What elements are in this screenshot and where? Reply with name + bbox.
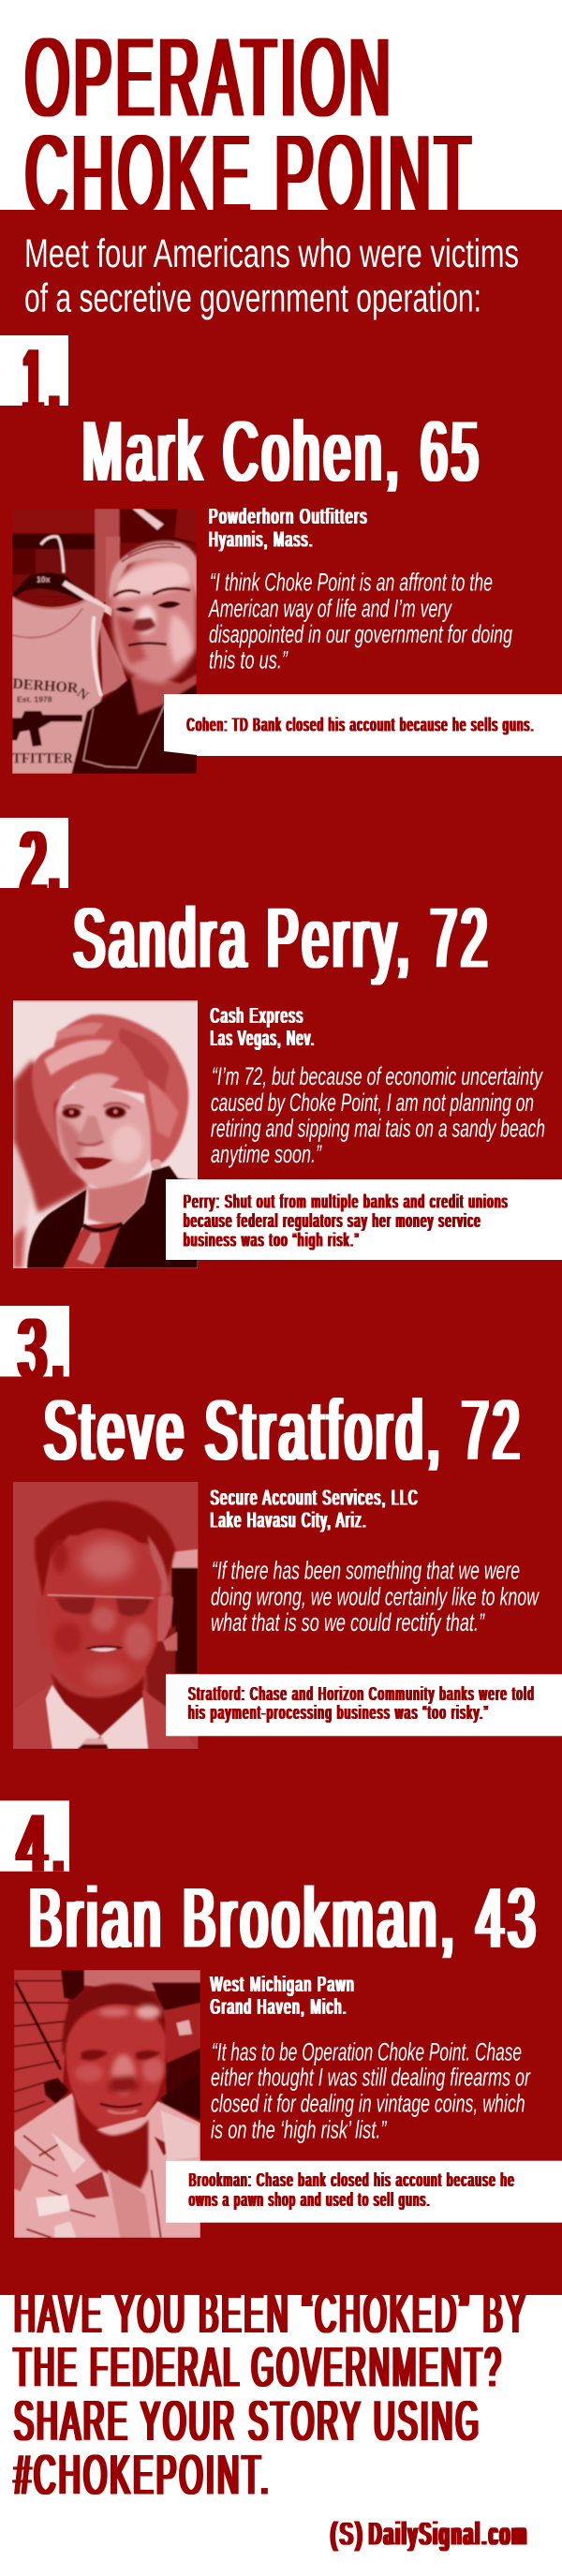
photo: Brian Brookman [14, 1970, 200, 2238]
panel: Brian Brookman [0, 1798, 562, 2238]
footer logo: DailySignal.com [331, 2517, 528, 2553]
quote [208, 569, 512, 674]
number badge 4 [0, 1800, 69, 1872]
number badge 2 [0, 818, 68, 888]
business name: West Michigan Pawn [211, 1972, 355, 1996]
number badge 4: 4 [18, 1798, 47, 1892]
number badge 1 [0, 335, 68, 406]
number badge 1: . [43, 333, 65, 427]
footer logo: DailySignal.com: (S) [331, 2517, 365, 2553]
quote [211, 1557, 540, 1636]
number badge 1: 1 [23, 333, 42, 427]
photo: Steve Stratford [13, 1482, 199, 1749]
business name: Secure Account Services, LLC [211, 1486, 419, 1510]
quote [211, 2037, 531, 2143]
business name [211, 1972, 355, 2019]
panel: Mark Cohen [0, 333, 562, 774]
number badge 3 [0, 1306, 69, 1377]
photo: Sandra Perry [13, 1000, 198, 1268]
business name [209, 504, 368, 552]
photo: Mark Cohen: TFITTER [12, 751, 73, 767]
number badge 3: . [47, 1303, 68, 1397]
business name: Las Vegas, Nev. [211, 1026, 316, 1050]
callout [166, 1674, 562, 1736]
business name: Powderhorn Outfitters [209, 504, 368, 528]
quote: this to us.” [209, 646, 288, 674]
intro text [24, 231, 519, 320]
business name: Hyannis, Mass. [209, 527, 314, 552]
panel: Steve Stratford [0, 1302, 562, 1749]
business name: Cash Express [211, 1003, 304, 1028]
business name [211, 1003, 316, 1050]
photo: Mark Cohen [12, 509, 197, 774]
photo: Mark Cohen: 10x [37, 574, 51, 584]
callout [166, 2161, 562, 2223]
callout [164, 694, 562, 756]
quote: is on the ‘high risk’ list.” [211, 2115, 387, 2143]
call to action: closing heading [13, 2282, 528, 2507]
call to action: closing heading: #CHOKEPOINT. [14, 2444, 272, 2507]
number badge 3: 3 [19, 1302, 46, 1397]
quote [211, 1062, 545, 1168]
callout: business was too “high risk.” [184, 1230, 360, 1251]
number badge 2: 2 [21, 815, 46, 910]
title [25, 15, 475, 237]
number badge 4: . [48, 1798, 69, 1892]
photo: Mark Cohen: Est. 1978 [17, 695, 52, 704]
business name [211, 1486, 419, 1532]
panel: Sandra Perry [0, 815, 562, 1268]
photo: Mark Cohen: DERHOR [12, 676, 79, 697]
number badge 2: . [43, 815, 65, 910]
business name: Grand Haven, Mich. [211, 1994, 348, 2019]
quote: anytime soon.” [211, 1140, 322, 1168]
photo: Mark Cohen: N [74, 686, 91, 703]
callout [166, 1179, 562, 1260]
business name: Lake Havasu City, Ariz. [211, 1508, 367, 1532]
